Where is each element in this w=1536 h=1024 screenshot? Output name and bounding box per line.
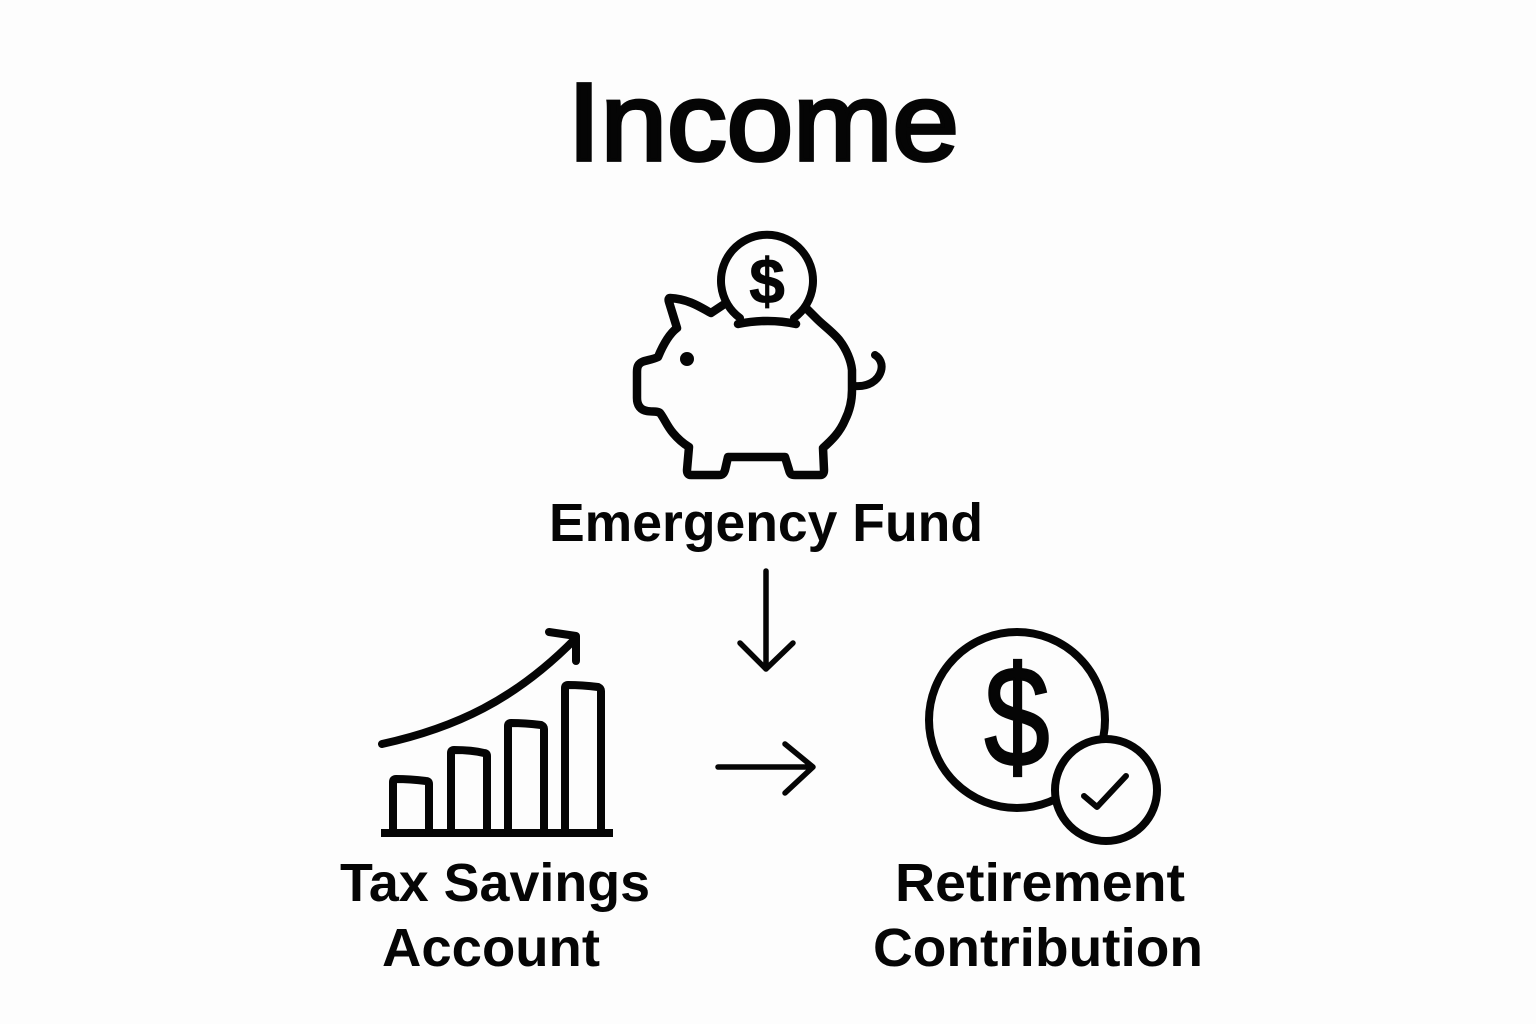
arrow: right [718,744,813,793]
large dollar sign: $ [984,637,1050,797]
check badge circle [1055,739,1157,841]
coin slot [738,321,796,324]
label: emergency fund: Emergency Fund [549,493,983,553]
pig tail [855,355,882,386]
icon: dollar coin with check badge [929,632,1157,841]
rising arrow [382,632,576,744]
title: Income [568,61,959,184]
coin outline [721,235,813,318]
panel: emergency fund [549,235,983,553]
large coin outline [929,632,1105,808]
bars [393,685,601,831]
label line 2: Contribution [873,918,1203,978]
label line 1: Tax Savings [340,853,650,913]
pig body outline [637,298,852,475]
check mark [1084,776,1126,807]
icon: growth bar chart [381,632,613,837]
coin dollar sign: $ [749,245,785,317]
pig eye [680,352,694,366]
chart baseline [381,829,613,837]
panel: tax savings account [340,632,650,978]
icon: piggy bank with coin [637,235,882,475]
label: tax savings account [340,853,650,978]
arrow: down [740,571,793,669]
panel: retirement contribution [873,632,1203,978]
label line 1: Retirement [895,853,1185,913]
label line 2: Account [382,918,600,978]
label: retirement contribution [873,853,1203,978]
